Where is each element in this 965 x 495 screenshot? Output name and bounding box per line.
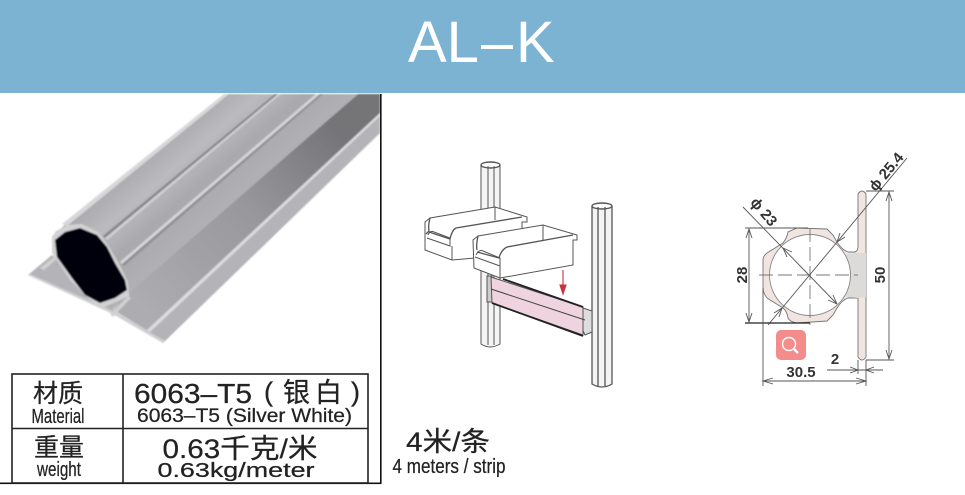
spec table — [12, 374, 368, 483]
title — [408, 10, 555, 75]
right bin — [473, 225, 577, 278]
phi 25.4 leader — [768, 158, 907, 325]
web shading — [846, 253, 866, 298]
dimension 30.5 and 2 — [763, 288, 883, 386]
dimension labels: 28 — [734, 267, 751, 283]
left bin — [425, 207, 527, 260]
dimension 28 — [745, 228, 810, 323]
length note — [392, 427, 506, 478]
usage diagram: bins on rail — [425, 162, 612, 387]
photo frame lines — [0, 94, 382, 484]
material row: 银 — [283, 378, 310, 408]
title: AL — [408, 10, 479, 75]
phi 23 leader — [743, 207, 837, 304]
tube opening — [52, 224, 129, 308]
material row: 6063–T5 (Silver White) — [137, 405, 352, 427]
weight row: 0.63kg/meter — [158, 460, 315, 482]
dimension 50 — [866, 191, 894, 360]
material row: ( — [264, 377, 273, 407]
dimension labels — [734, 149, 908, 381]
length note: 4米/条 — [406, 427, 490, 457]
left post — [481, 162, 500, 347]
inner bore — [770, 234, 850, 316]
header banner — [0, 0, 965, 93]
title: – — [481, 10, 514, 75]
weight row: 重量 — [34, 434, 84, 462]
material row: 6063–T5 — [134, 378, 252, 409]
right post — [592, 203, 612, 387]
red arrow — [560, 270, 566, 294]
material row: 白 — [315, 378, 342, 408]
dimension labels: 2 — [831, 351, 839, 368]
length note: 4 meters / strip — [392, 455, 506, 478]
profile shape — [763, 191, 866, 360]
dimension labels: ϕ 23 — [747, 194, 780, 230]
dimension labels: 30.5 — [786, 364, 816, 381]
material row: ) — [351, 377, 360, 407]
dimension labels: ϕ 25.4 — [866, 149, 908, 195]
material row — [32, 377, 360, 428]
product photo: aluminium rail — [28, 94, 380, 343]
weight row: weight — [36, 459, 81, 481]
pink rail — [487, 276, 592, 336]
icon: magnifier badge — [776, 330, 806, 360]
title: K — [516, 10, 555, 75]
material row: 材质 — [33, 380, 83, 408]
dimension labels: 50 — [872, 267, 889, 283]
centre lines — [759, 228, 858, 325]
material row: Material — [32, 406, 84, 428]
weight row — [34, 434, 318, 482]
weight row: 0.63千克/米 — [162, 434, 318, 464]
cross-section drawing — [734, 149, 908, 386]
